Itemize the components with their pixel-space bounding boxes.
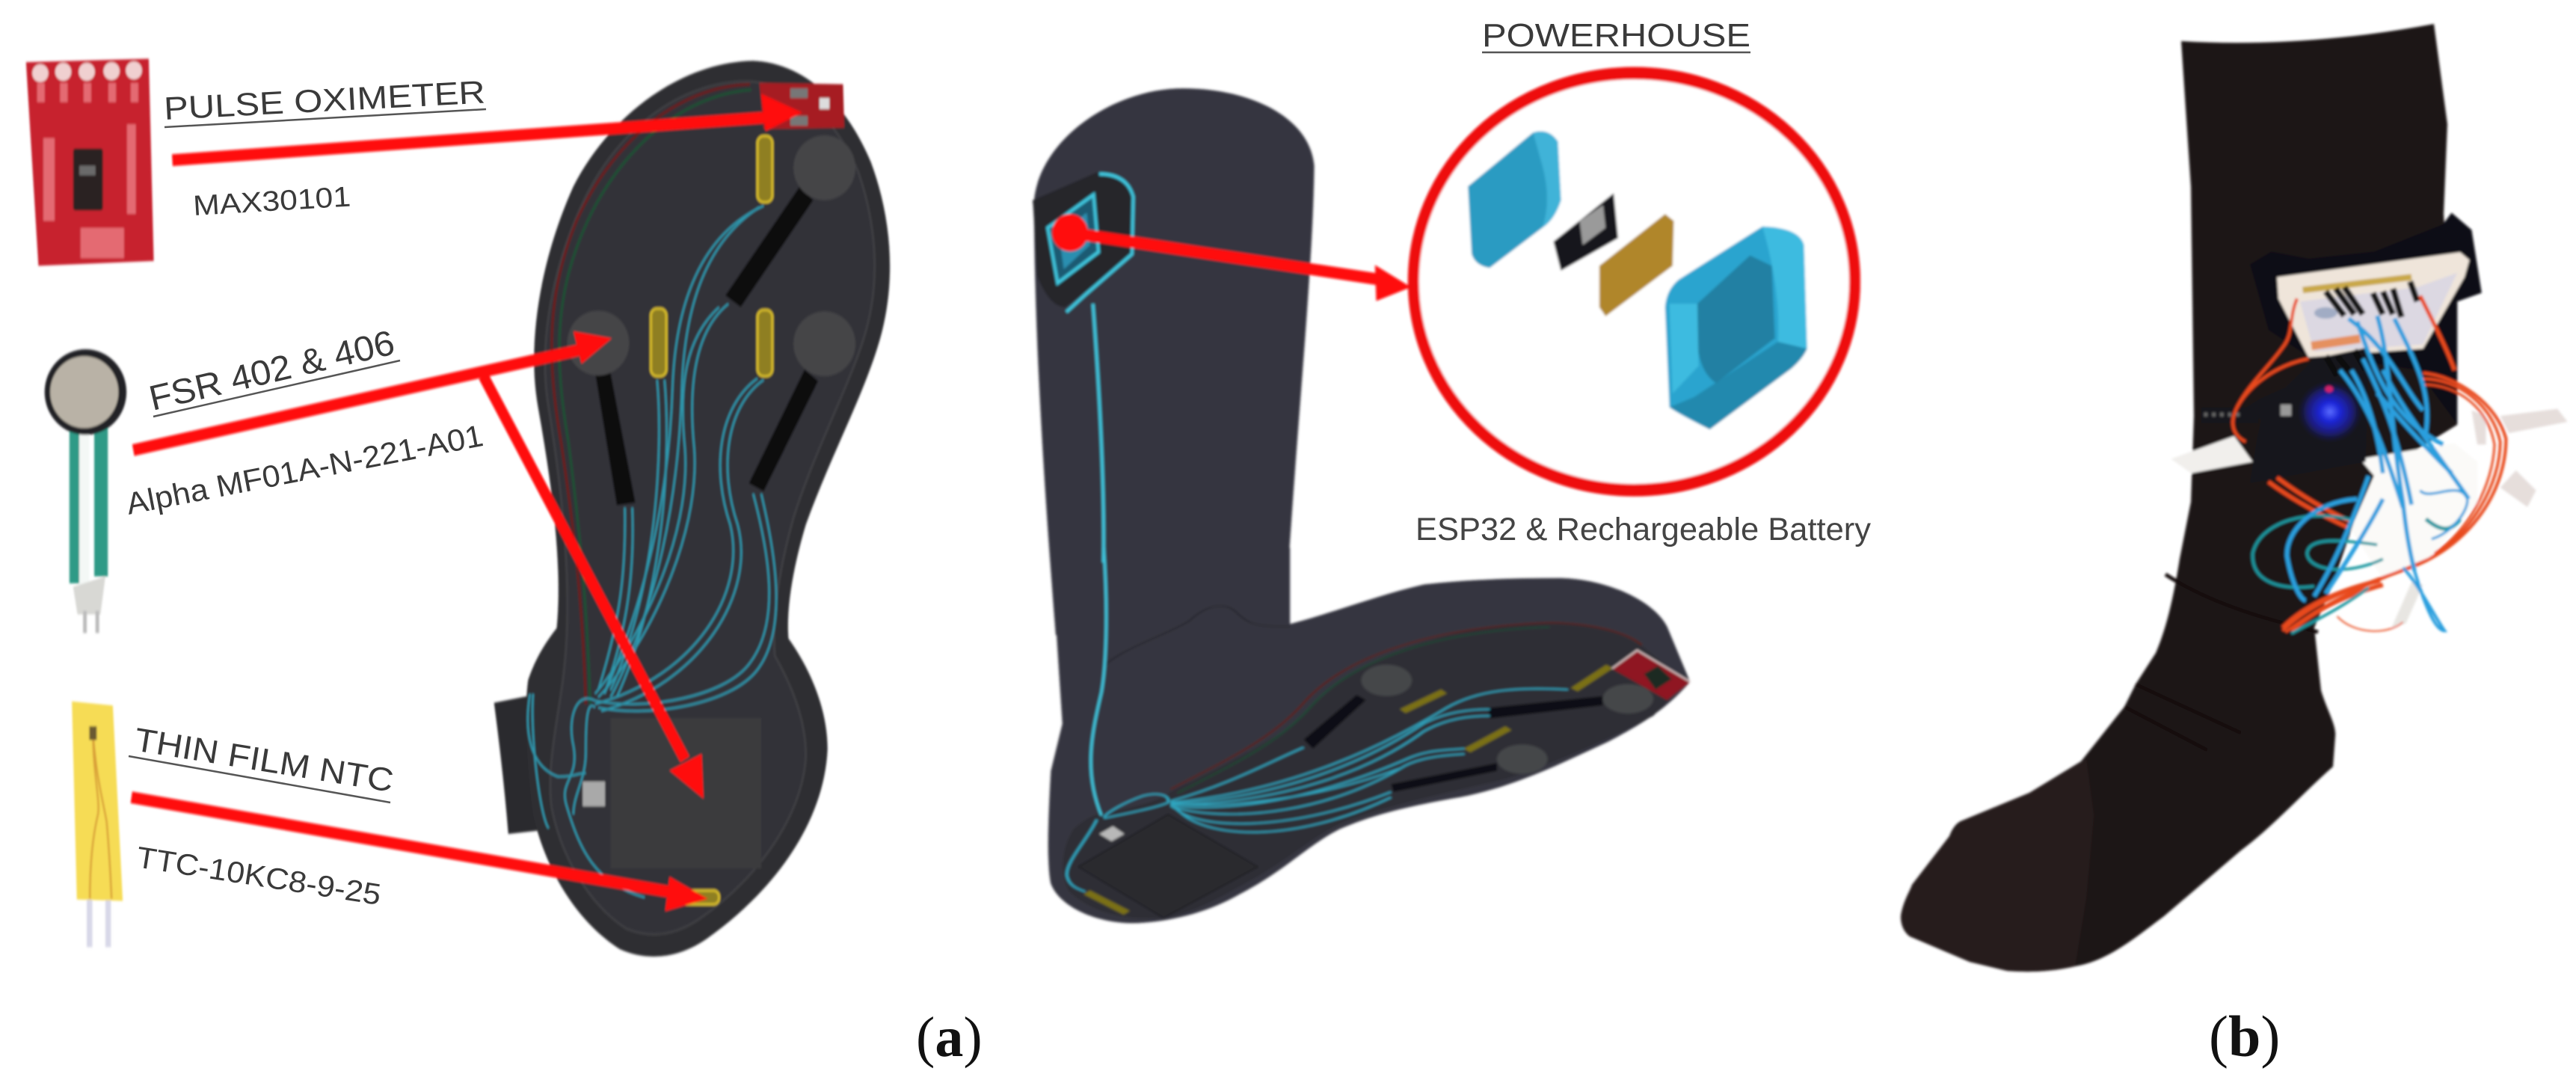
thermistors on insole <box>651 136 772 904</box>
FSR pads and tails <box>568 135 855 506</box>
orange wires <box>2233 295 2506 632</box>
sensor wires <box>528 206 776 898</box>
heading: pulse oximeter: PULSE OXIMETER <box>163 75 486 127</box>
boot foot and sole <box>1048 547 1690 923</box>
black connectors under breadboard <box>2326 350 2366 376</box>
icon: force sensitive resistor <box>45 349 126 633</box>
arrow: thin film NTC <box>132 797 708 911</box>
boot details and powerhouse <box>1033 73 1854 562</box>
connector cable <box>2201 405 2291 423</box>
icon: thin film NTC thermistor <box>72 702 123 947</box>
label: TTC part number: TTC-10KC8-9-25 <box>135 841 383 912</box>
powerhouse pad on sole <box>1078 814 1258 918</box>
white tags <box>2171 409 2568 628</box>
sock folds <box>2124 574 2318 750</box>
arrow: FSR to pad <box>133 331 612 450</box>
caption: (b): (b) <box>2209 1004 2280 1069</box>
black jumper connectors on breadboard <box>2326 281 2417 317</box>
oximeter on insole <box>760 83 844 129</box>
exploded view: ESP32 board <box>1554 193 1618 271</box>
heading: powerhouse: POWERHOUSE <box>1482 17 1750 54</box>
sole face <box>1063 622 1685 918</box>
sock <box>1901 24 2457 972</box>
ESP32 device <box>2237 347 2369 483</box>
pocket on boot <box>1033 173 1134 312</box>
icon: pulse oximeter board <box>26 58 154 266</box>
label: MAX30101: MAX30101 <box>192 182 351 222</box>
prototype electronics on the sock <box>2171 212 2568 633</box>
FSR tails and pads <box>1304 665 1653 792</box>
label: Alpha part number: Alpha MF01A-N-221-A01 <box>123 418 486 521</box>
oximeter on toe <box>1612 650 1690 700</box>
caption: (a): (a) <box>916 1006 983 1069</box>
panel: insole with sensors (a, left) <box>26 58 890 957</box>
heading: FSR 402 and 406: FSR 402 & 406 <box>145 322 398 418</box>
foot outline <box>1048 547 1690 923</box>
exploded view: case <box>1665 227 1807 429</box>
exploded view: rechargeable battery <box>1599 214 1673 316</box>
edge wiring red and green <box>552 85 751 704</box>
powerhouse pad <box>611 718 761 868</box>
exploded view: lid <box>1468 132 1561 268</box>
label: ESP32 and rechargeable battery: ESP32 & Rechargeable Battery <box>1415 512 1872 547</box>
toe shading <box>1901 759 2094 972</box>
powerhouse circle callout <box>1413 73 1854 490</box>
thermistors on sole <box>1086 666 1610 912</box>
icon: heel strap block <box>494 694 558 834</box>
insole shape <box>526 61 890 957</box>
teal wires <box>2253 516 2460 633</box>
connector <box>1099 826 1125 841</box>
heading: thin film NTC: THIN FILM NTC <box>132 722 396 800</box>
connector square <box>582 782 605 806</box>
sole edge wiring <box>1170 622 1642 794</box>
panel: boot with powerhouse (a, right) <box>1033 73 1854 923</box>
insole inner face <box>545 82 875 934</box>
white paper behind the wires <box>2352 444 2477 579</box>
wires on sole <box>1067 689 1568 892</box>
foot upper fold lines <box>1104 606 1290 666</box>
pouch <box>2250 212 2482 425</box>
wire up the heel <box>1091 547 1106 815</box>
wire down the shaft <box>1093 304 1104 562</box>
boot shaft <box>1034 88 1315 635</box>
arrow: pocket to powerhouse <box>1052 214 1411 301</box>
arrow: FSR to powerhouse pad <box>484 376 704 799</box>
blue wires <box>2287 316 2469 631</box>
blue LED glow <box>2297 380 2363 444</box>
panel: photo of sock prototype (b) <box>1901 24 2568 972</box>
arrow: pulse oximeter <box>172 94 802 160</box>
breadboard <box>2277 252 2469 358</box>
red LED <box>2325 386 2333 393</box>
